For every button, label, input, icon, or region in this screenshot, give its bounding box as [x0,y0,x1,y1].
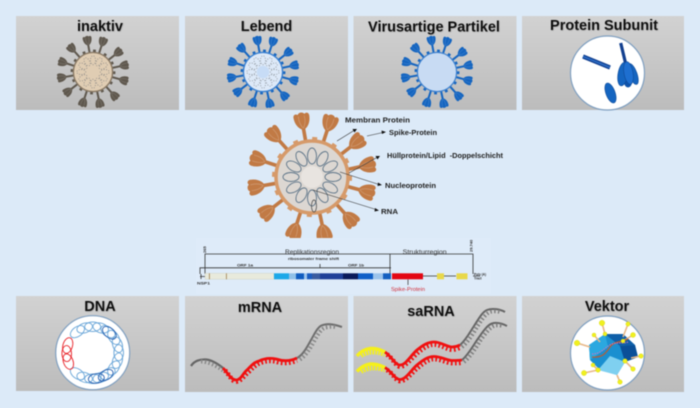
icon: live virus [226,35,300,109]
heading: saRNA: saRNA [407,304,455,320]
panel: mRNA [185,296,348,392]
heading: Vektor: Vektor [585,299,630,315]
genome labels: ribosomaler frame shift [288,257,340,261]
callout labels [345,116,504,216]
genome labels: ORF 1b [348,264,365,268]
icon: viral vector [570,316,644,390]
genome labels: 265 [202,246,207,253]
panel: Protein Subunit [522,16,684,110]
heading: inaktiv: inaktiv [77,19,123,35]
callout arrows [313,129,386,212]
genome labels: NSP1 [197,282,210,286]
panel: saRNA [354,296,516,392]
genome brackets [200,254,480,279]
panel: DNA [16,296,179,391]
genome labels: ORF 1a [237,264,254,268]
genome labels [197,239,486,293]
icon: plasmid DNA [56,316,130,390]
callout labels: Nucleoprotein [385,181,436,190]
lower strand [357,323,507,381]
genome labels: Replikationsregion [285,250,339,256]
central coronavirus diagram [246,111,378,243]
callout labels: Membran Protein [345,116,411,124]
icon: saRNA strands [357,309,507,381]
callout labels: RNA [381,207,399,216]
genome labels: Tract [474,276,483,280]
genome labels: Spike-Protein [391,287,425,293]
panel: Virusartige Partikel [354,16,516,110]
genome map [196,238,491,294]
icon: virus-like particle [400,35,474,109]
icon: mRNA strand [191,324,342,382]
upper strand [357,309,505,366]
genome labels: Strukturregion [403,250,447,256]
panel: inaktiv [16,16,179,110]
genome labels: Poly (A) [474,272,486,276]
panel: Vektor [522,296,684,392]
panel: Lebend [185,16,348,110]
heading: mRNA: mRNA [238,300,283,316]
heading: Virusartige Partikel: Virusartige Partikel [368,20,500,36]
heading: Protein Subunit: Protein Subunit [550,18,658,34]
callout labels: Spike-Protein [389,128,437,137]
callout labels: Hüllprotein/Lipid -Doppelschicht [387,151,504,160]
genome bar segments [205,273,468,285]
icon: inactivated virus [56,35,130,109]
heading: Lebend: Lebend [241,19,292,35]
genome labels: 29.740 [468,239,474,252]
heading: DNA: DNA [84,299,116,315]
icon: protein subunits in circle [570,36,644,110]
